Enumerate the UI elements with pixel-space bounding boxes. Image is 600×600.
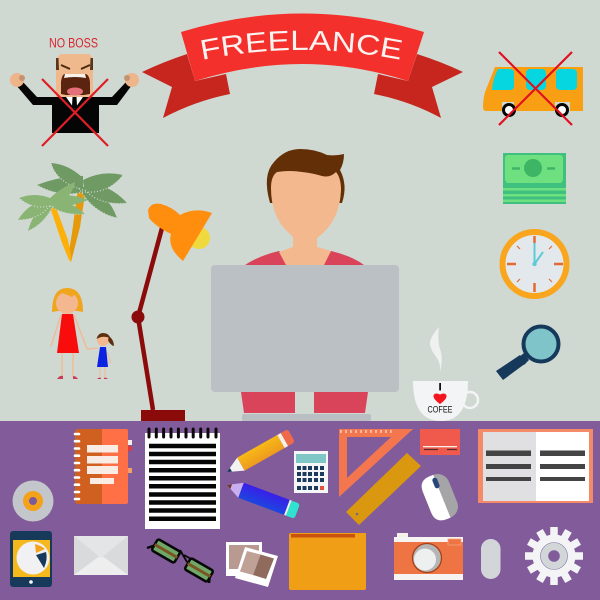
title text: FREELANCE [201,30,402,60]
title ribbon: FREELANCE [142,14,463,118]
icon: bank card [420,429,460,455]
icon: folder [289,533,366,590]
icon: palm trees [18,163,127,262]
icon: spiral notebook [75,429,132,504]
shirt [245,251,364,265]
icon: camera [394,533,463,580]
icon: crossed-out angry boss [10,54,139,146]
icon: photographs [226,542,278,587]
legs [241,392,295,413]
hair [267,149,345,203]
icon: mother and daughter [51,288,114,379]
icon: magnifying glass [496,326,558,380]
icon: open book [478,429,593,503]
icon: calculator [294,451,328,493]
icon: blue pencil [224,478,300,519]
icon: coffee cup with steam [413,327,478,421]
icon: stack of money [503,153,566,204]
icon: yellow pencil [223,429,295,479]
icon: wall clock [502,232,566,296]
icon: crossed-out bus [483,52,583,125]
icon: yellow ruler [346,453,421,525]
label: no boss: NO BOSS [49,36,98,50]
icon: compact disc [12,480,54,522]
icon: glasses [147,539,214,583]
icon: gear [514,516,594,596]
laptop [211,265,399,392]
icon: computer mouse [418,470,462,524]
laptop base [242,414,371,421]
icon: envelope [74,536,128,575]
neck and chest [279,232,331,265]
icon: set square [339,429,413,497]
person at laptop [211,149,399,421]
face [271,171,341,243]
icon: second mouse [481,539,500,579]
icon: tablet with pie chart [10,531,52,587]
icon: desk lamp [132,204,212,421]
icon: coffee cup with steam: COFEE [428,404,452,414]
icon: lined notepad [145,429,220,529]
